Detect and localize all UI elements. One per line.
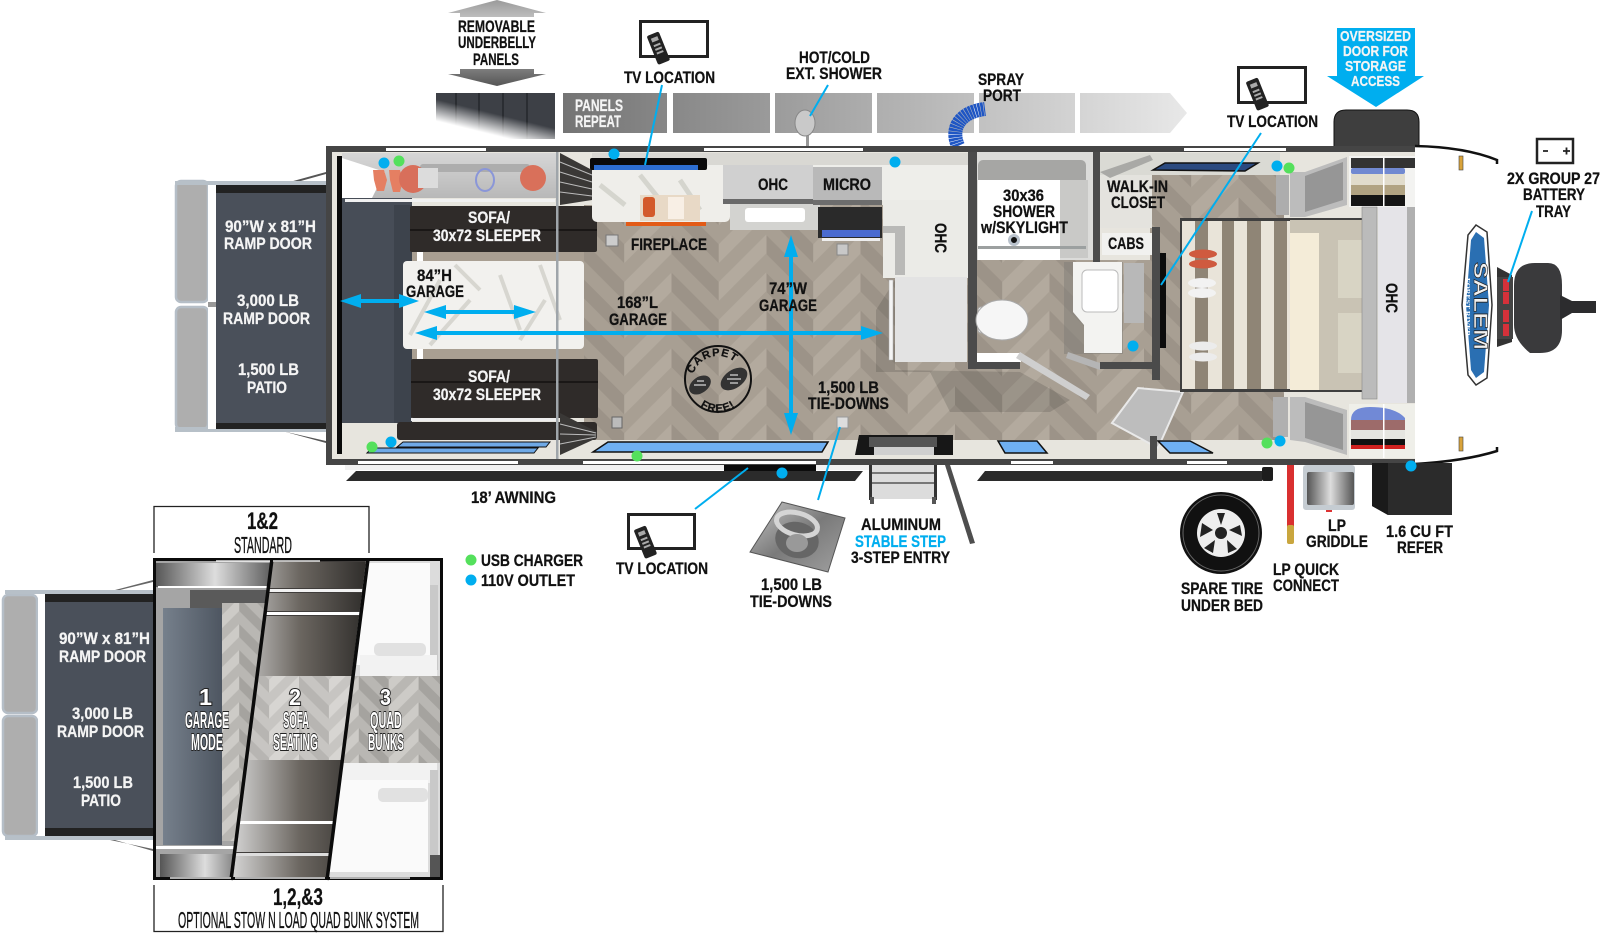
label: stable step: 3-STEP ENTRY [851,549,950,567]
garage area [342,198,584,423]
floor labels [406,236,889,413]
label: spray port [978,71,1024,105]
label: spare tire: UNDER BED [1181,597,1263,615]
text: ramp door specs: 3,000 LB [237,292,299,310]
divider line [556,152,558,459]
text: ramp door specs: RAMP DOOR [223,310,310,328]
text: inset ramp specs: 90”W x 81”H [59,630,150,648]
label: TV location right: TV LOCATION [1227,113,1318,131]
panel: trailer floorplan [326,146,1420,465]
repeating panels [563,93,1187,133]
icon: oversized storage door arrow: OVERSIZED [1340,28,1411,45]
bottom wardrobe [1273,397,1347,455]
label: tie-downs [750,576,832,611]
icon: oversized storage door arrow: STORAGE [1345,58,1406,75]
label: spare tire: SPARE TIRE [1181,580,1263,598]
label: hot cold exterior shower: HOT/COLD [799,49,870,67]
icon: LP quick connect hose [1287,465,1294,544]
floor labels: TIE-DOWNS [808,395,889,413]
text: inset ramp specs: RAMP DOOR [59,648,146,666]
panel: optional bracket: 1,2,&3 [273,884,323,911]
label: LP griddle: GRIDDLE [1306,533,1368,551]
icon: carpet free stamp: FREE! [701,400,734,411]
outlet markers [366,148,1416,478]
floor labels: GARAGE [759,297,817,315]
label: quad bunks [368,684,404,755]
panel: underbelly panels strip [430,0,1187,140]
black inner wall line [337,156,342,454]
shower: SHOWER [993,203,1055,221]
panel: garage mode, sofa seating, quad bunks inset: GARAGE [185,707,229,733]
text: panels repeat: REPEAT [575,113,621,131]
panel: garage mode, sofa seating, quad bunks inset: BUNKS [368,729,404,755]
legend: outlets: USB CHARGER [481,552,583,570]
text: ramp door specs [223,218,316,397]
overhead cabinet and microwave: OHC [758,176,788,194]
label: refrigerator: REFER [1397,539,1443,557]
icon: TV location bottom [628,514,694,559]
marble table [403,261,584,349]
label: sofa seating [273,684,318,755]
icon: oversized storage door arrow: DOOR FOR [1343,43,1408,60]
label: spray port: PORT [983,87,1021,105]
floor: herringbone [584,175,1284,440]
sofa top [410,206,597,252]
bottom shelves [1349,404,1415,458]
text: inset ramp specs: 1,500 LB [73,774,133,792]
shower: w/SKYLIGHT [980,219,1068,237]
garage side windows [367,442,550,453]
segment 1: garage mode [155,560,277,880]
label: LP quick connect: LP QUICK [1273,561,1339,579]
label: LP quick connect: CONNECT [1273,577,1339,595]
sofa bottom [397,359,598,440]
icon: shower head and spray hose [795,109,985,149]
toilet [976,300,1028,340]
label: sofa seating: 2 [289,684,301,710]
white wall strips [358,148,1286,464]
panel: optional bracket [154,884,443,933]
tie-down anchors [606,235,848,428]
bedroom top band [1100,153,1280,178]
fireplace counter [592,167,730,226]
entry door threshold [855,435,953,455]
floor labels: FIREPLACE [631,236,707,254]
label: battery tray: TRAY [1536,203,1571,221]
text: inset ramp specs [57,630,150,810]
icon: TV location top [640,22,708,65]
text: removable underbelly panels: UNDERBELLY [458,34,536,52]
label: spare tire [1181,580,1263,615]
sofa top: 30x72 SLEEPER [433,227,541,245]
text: inset ramp specs: RAMP DOOR [57,723,144,741]
panel: optional bracket: OPTIONAL STOW N LOAD QUAD BUNK SYSTEM [178,907,419,933]
logo: Salem Forest River: FOREST RIVER [1464,278,1471,336]
label: garage mode: 1 [199,684,212,710]
icon: tie-down ring [750,502,845,572]
nose of trailer [1415,146,1497,464]
icon: TV location right [1238,68,1306,111]
label: garage mode: MODE [191,729,223,755]
bathroom walls [968,152,1166,400]
floor labels: GARAGE [406,283,464,301]
wardrobe pleats [560,153,597,455]
frame and slanted dividers [154,559,442,880]
shower [977,152,1093,260]
icon: carpet free stamp [684,345,752,413]
floor patch and top wardrobe [1276,157,1347,217]
sofa top: SOFA/ [468,209,510,227]
logo: Salem Forest River: SALEM [1469,262,1490,350]
walk-in closet: WALK-IN [1107,178,1168,196]
label: quad bunks: QUAD [370,707,402,733]
label: hot cold exterior shower [786,49,882,83]
panel: garage mode, sofa seating, quad bunks inset [153,558,445,880]
icon: battery [1537,139,1573,163]
shadow and refrigerator block [876,277,1070,412]
entry steps [869,465,975,544]
bathroom sink [1064,262,1144,370]
top shelves [1349,156,1415,207]
stove [818,207,882,241]
hitch [1497,263,1596,353]
front overhead cabinet: OHC [1382,283,1400,313]
cabinets box: CABS [1108,235,1144,253]
legend: outlets [466,552,583,590]
legend: outlets: 110V OUTLET [481,572,575,590]
leader lines [645,85,1532,509]
floor labels: 74”W [769,280,807,298]
text: ramp door specs: PATIO [247,379,287,397]
label: TV location bottom: TV LOCATION [616,560,708,578]
logo: Salem Forest River [1462,225,1492,385]
segment 2: sofa seating [230,560,370,880]
dark corrugated panel [430,92,557,140]
text: ramp door specs: 1,500 LB [238,361,299,379]
front overhead cabinet [1362,207,1415,403]
label: awning: 18’ AWNING [471,489,556,507]
label: spray port: SPRAY [978,71,1024,89]
door [1112,388,1183,448]
panel: garage mode, sofa seating, quad bunks inset: SEATING [273,729,318,755]
text: panels repeat: PANELS [575,97,623,115]
floor labels: 168”L [617,294,658,312]
panel: ramp door [175,172,326,443]
label: stable step: STABLE STEP [855,533,946,551]
overhead cabinet and microwave: MICRO [823,176,871,194]
icon: oversized storage door arrow [1327,28,1424,107]
panel: inset ramp door [3,580,153,851]
awning [345,465,1273,481]
panel: standard bracket: 1&2 [247,508,278,535]
label: tie-downs: 1,500 LB [761,576,822,594]
label: tie-downs: TIE-DOWNS [750,593,832,611]
icon: oversized storage door arrow: ACCESS [1351,73,1400,90]
label: battery tray [1507,170,1600,221]
label: quad bunks: 3 [380,684,391,710]
label: stable step: ALUMINUM [861,516,941,534]
label: refrigerator [1386,523,1453,557]
text: inset ramp specs: PATIO [81,792,121,810]
text: removable underbelly panels: REMOVABLE [458,18,535,36]
overhead cabinet and microwave [723,165,882,205]
walk-in closet [1100,153,1168,228]
floor windows [593,163,1258,453]
label: refrigerator: 1.6 CU FT [1386,523,1453,541]
icon: refrigerator box [1372,463,1452,515]
label: LP quick connect [1273,561,1339,595]
icon: carpet free stamp: CARPET [688,348,739,372]
icon: LP griddle [1303,465,1355,512]
text: removable underbelly panels [458,18,536,69]
label: LP griddle [1306,517,1368,551]
text: removable underbelly panels: PANELS [473,51,519,69]
shower: 30x36 [1003,187,1044,205]
kitchen counter band [592,153,968,278]
sofa bottom: 30x72 SLEEPER [433,386,541,404]
TV top [590,158,707,170]
label: TV location top: TV LOCATION [624,69,715,87]
label: battery tray: BATTERY [1523,186,1585,204]
text: inset ramp specs: 3,000 LB [72,705,133,723]
label: stable step [851,516,950,567]
panel: standard bracket [154,506,369,558]
blue dimension arrows [340,235,883,435]
wall divider near door [1150,436,1157,459]
storage door bump [1334,110,1419,147]
label: OHC kitchen side: OHC [931,223,949,253]
text: panels repeat [575,97,623,131]
label: hot cold exterior shower: EXT. SHOWER [786,65,882,83]
icon: up and down arrows [448,0,546,86]
segment 3: quad bunks [325,560,445,880]
text: ramp door specs: RAMP DOOR [224,235,312,253]
sofa bottom: SOFA/ [468,368,510,386]
cabinets box [1102,233,1152,255]
walk-in closet: CLOSET [1111,194,1165,212]
bed [1180,218,1362,392]
label: garage mode [185,684,229,755]
label: sofa seating: SOFA [283,707,309,733]
text: ramp door specs: 90”W x 81”H [225,218,316,236]
floor labels: 84”H [417,267,452,285]
garage shelf with gear [342,153,557,202]
panel: standard bracket: STANDARD [234,532,292,558]
icon: spare tire [1180,492,1262,574]
label: LP griddle: LP [1328,517,1346,535]
floor labels: 1,500 LB [818,379,879,397]
floor labels: GARAGE [609,311,667,329]
